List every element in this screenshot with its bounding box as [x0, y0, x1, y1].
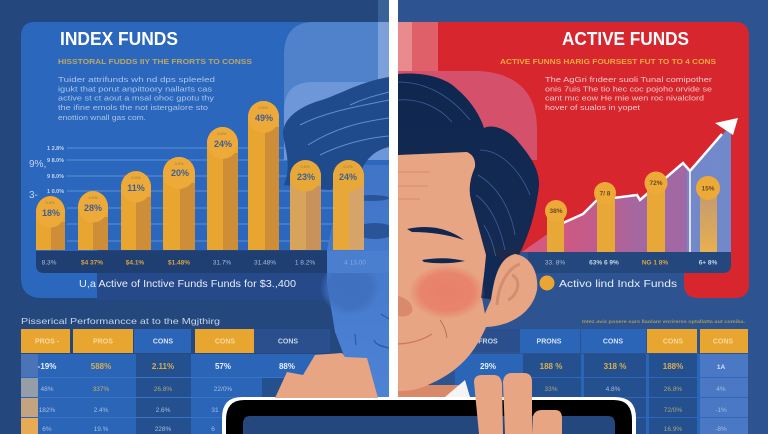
axis labels: 1 0.0% [47, 189, 64, 195]
bar small labels: 0.0% [300, 164, 310, 169]
eye [422, 258, 465, 263]
table: left performance: 228% [155, 426, 172, 433]
axis labels: 3- [29, 190, 38, 201]
table: left performance: 22/0% [214, 386, 232, 393]
row values [480, 362, 725, 371]
axis labels [29, 146, 64, 201]
row values: 57% [215, 362, 231, 371]
table: left performance: 337% [93, 386, 110, 393]
header row: PROS [93, 338, 113, 346]
bar values: 28% [84, 203, 102, 213]
chart gridlines [67, 148, 350, 241]
chart base strip: active funds: NG 1 8% [642, 260, 668, 266]
text block: index funds description: enottion wnall gas com. [58, 113, 146, 122]
bars [545, 172, 720, 252]
eyebrow [407, 227, 464, 240]
chart base strip: active funds: 33. 8% [545, 260, 565, 266]
table: right performance: -8% [715, 426, 727, 433]
table: left performance: 19.% [94, 426, 109, 433]
tablet [222, 397, 636, 434]
bar small labels: 0.0% [45, 200, 55, 205]
table heading: left: Pisserical Performancce at to the Mgjthirg [21, 316, 220, 326]
chart base strip: index funds: $4.1% [126, 260, 144, 266]
chart base strip: active funds: 6+ 8% [699, 260, 718, 266]
bar values: 24% [214, 139, 232, 149]
text block: active funds description: The AgGri frıdeer suoli Tunal comipother [545, 75, 713, 84]
trend arrow [563, 118, 738, 252]
table: right performance: 26.8% [664, 386, 682, 393]
row values: 588% [91, 362, 111, 371]
bar values [42, 113, 357, 218]
header row [21, 329, 330, 353]
illustration: natural half of face [398, 74, 539, 397]
axis labels: 9%, [29, 159, 46, 170]
ear [483, 254, 537, 327]
bar values: 7/ 8 [600, 190, 611, 198]
legend: active funds: Activo lind Indx Funds [559, 278, 677, 290]
title: index funds: INDEX FUNDS [60, 29, 178, 49]
chart base strip: index funds: $1.48% [168, 260, 190, 266]
subtitle: index funds: HISSTORAL FUDDS IIY THE FRORTS TO CONSS [58, 57, 252, 66]
chart base strip: index funds: 1 8.2% [295, 260, 315, 266]
axis labels: 1 2.8% [47, 146, 64, 152]
header row: CONS [153, 338, 173, 346]
header row: CONS [278, 338, 298, 346]
chart base strip: index funds: 4 13.00 [344, 260, 366, 266]
chart base strip: index funds: 31.48% [254, 260, 276, 266]
title: active funds: ACTIVE FUNDS [562, 29, 689, 49]
axis labels: 9 8.0% [47, 158, 64, 164]
chart base strip: index funds: 31.7% [213, 260, 231, 266]
bar values [549, 180, 715, 215]
bar values: 49% [255, 113, 273, 123]
row values: 188 % [540, 362, 562, 371]
bar values: 72% [649, 180, 663, 187]
table: left performance: 31 [211, 407, 219, 414]
table: right performance: 33% [544, 386, 558, 393]
legend: active funds [540, 276, 677, 290]
table: right performance: 16.9% [664, 426, 682, 433]
header row: CONS [663, 338, 683, 346]
table: left performance: 48% [40, 386, 54, 393]
text block: index funds description: Tuider attrifunds wh nd dps spleeled [58, 75, 215, 84]
table: right performance: -1% [715, 407, 727, 414]
text block: active funds description: hover of sualos in yopet [545, 103, 641, 112]
table: left performance: 2.6% [156, 407, 171, 414]
table: right performance [455, 329, 748, 434]
axis labels: 9 8.0% [47, 174, 64, 180]
text block: active funds description: onis 7uis The tio hec coc pojoho orvide se [545, 84, 712, 94]
bar small labels: 0.0% [88, 195, 98, 200]
panel: active funds [398, 22, 749, 298]
illustration: blue half of face [283, 77, 395, 397]
chart base strip: active funds: 63% 6 9% [589, 260, 619, 266]
bar values: 38% [549, 208, 563, 215]
bar small labels [45, 105, 353, 205]
row values [38, 362, 295, 371]
text block: index funds description [58, 75, 215, 122]
row values: 188% [663, 362, 683, 371]
header row [460, 329, 748, 353]
blush [409, 265, 485, 319]
bar small labels: 0.0% [131, 175, 141, 180]
row values: 2.11% [152, 362, 174, 371]
table: left performance: 6% [42, 426, 52, 433]
neck and collar [398, 385, 462, 397]
bar values: 11% [127, 183, 145, 193]
hair [398, 74, 539, 300]
panel: index funds [21, 22, 389, 298]
table: left performance: 6 [211, 426, 215, 433]
header row: PRONS [537, 338, 562, 346]
caption: index funds: U,a Active of Inctive Funds Funds for $3.,400 [79, 278, 296, 290]
divider [389, 0, 398, 434]
forehead lines [398, 172, 430, 199]
nose [398, 296, 412, 317]
row values: 88% [279, 362, 295, 371]
header row: CONS [215, 338, 235, 346]
text block: active funds description [545, 75, 713, 112]
bar values: 18% [42, 208, 60, 218]
text block: index funds description: igukt that porut anpittoory nallarts cas [58, 84, 212, 94]
header row: CONS [603, 338, 623, 346]
chart base strip: index funds [36, 251, 389, 273]
text block: index funds description: active st ct aout a msal ohoc gpotu thy [58, 94, 214, 102]
table: right performance: 4% [716, 386, 726, 393]
header row: FROS [478, 338, 498, 346]
subtitle: active funds: ACTIVE FUNNS HARIG FOURSEST FUT TO TO 4 CONS [500, 57, 716, 66]
chart base strip: index funds: $4 37% [81, 260, 103, 266]
bar values: 20% [171, 168, 189, 178]
bar small labels: 0.0% [174, 161, 184, 166]
bars [36, 101, 364, 250]
table: right performance: 4.8% [606, 386, 621, 393]
text block: active funds description: cant mıc eow He mie wen roc nivalclord [545, 94, 704, 102]
bar small labels: 0.0% [343, 164, 353, 169]
table: left performance: 2.4% [94, 407, 109, 414]
table note: right: Intez avis posere oars llaolanr enrirerss optallatta aut comika. [582, 319, 745, 325]
row values: 1A [717, 364, 725, 371]
row values: 318 % [604, 362, 626, 371]
chart base strip: index funds: 8.3% [42, 260, 57, 266]
bar values: 23% [297, 172, 315, 182]
table: right performance: 72/0% [664, 407, 682, 414]
smile [398, 334, 432, 344]
area and arrow chart: active funds [522, 118, 738, 252]
row values: 29% [480, 362, 496, 371]
bar values: 24% [339, 172, 357, 182]
table: left performance: 182% [39, 407, 56, 414]
row values: -19% [38, 362, 56, 371]
header row: PROS - [35, 338, 60, 346]
bar small labels: 0.0% [258, 105, 268, 110]
bar values: 15% [701, 186, 715, 192]
hand: left [275, 353, 378, 398]
text block: index funds description: the ifine emols the not istergalore sto [58, 103, 208, 112]
hand: right fingers [474, 373, 562, 434]
table: left performance: 26.8% [154, 386, 172, 393]
bar small labels: 0.0% [217, 131, 227, 136]
face skin [398, 152, 487, 391]
bar chart: index funds [29, 101, 364, 250]
header row: CONS [713, 338, 733, 346]
table: left performance [21, 329, 342, 434]
chart base strip: active funds [528, 252, 731, 273]
